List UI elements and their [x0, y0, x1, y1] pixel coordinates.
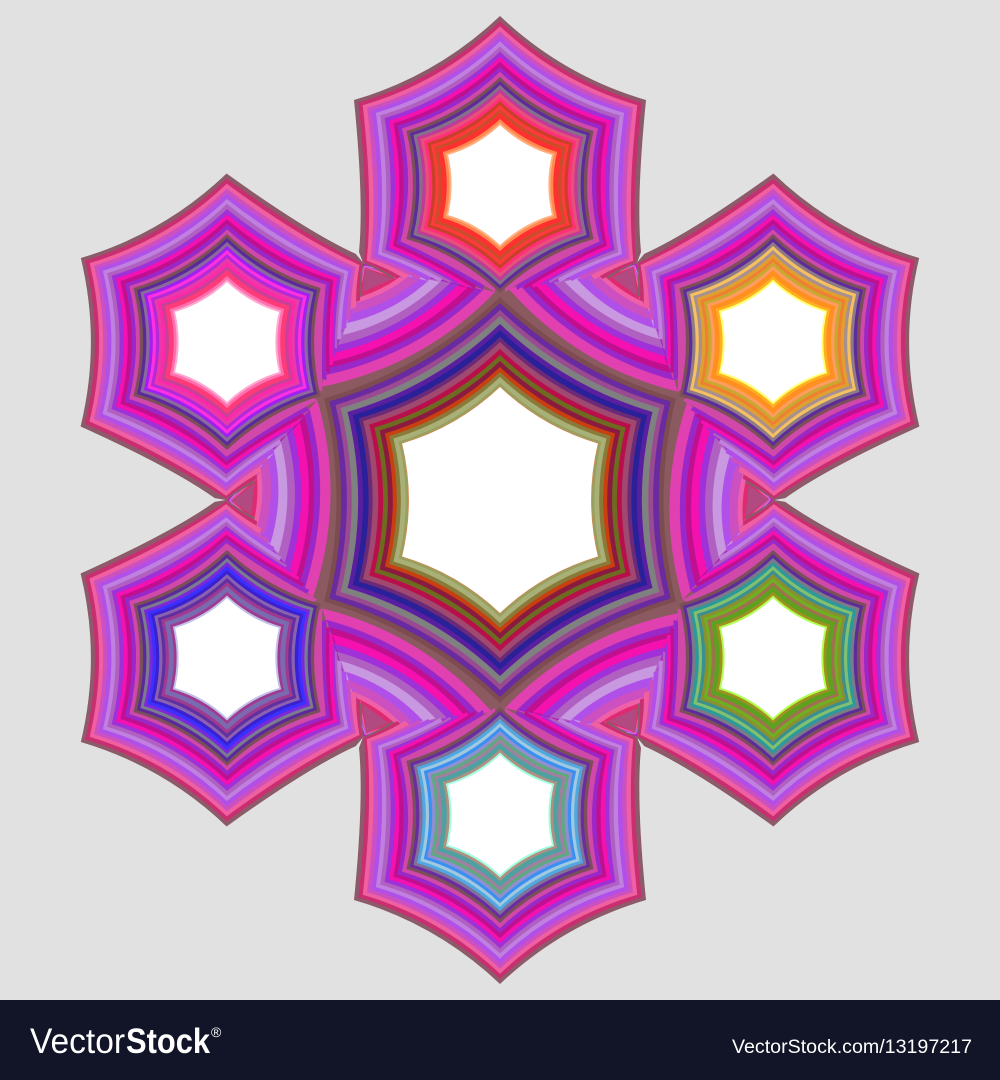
hexagon: lower left blue: [133, 550, 321, 766]
outer bands: upper right petal: [607, 132, 992, 522]
hexagon: upper left magenta: [133, 234, 321, 450]
hexagon: top red: [406, 77, 594, 293]
outer bands: lower right petal: [607, 478, 992, 868]
outer bands: bottom petal: [354, 708, 646, 984]
logo: VectorStock: ®: [211, 1024, 222, 1040]
hexagon: lower right green: [679, 550, 867, 766]
logo: VectorStock: [30, 1022, 222, 1061]
hexagon: centre: [324, 297, 676, 703]
hexagon: bottom cyan: [406, 707, 594, 923]
hexagon: upper right yellow: [679, 234, 867, 450]
image id: VectorStock.com/13197217: [732, 1037, 972, 1058]
footer bar: [0, 1000, 1000, 1080]
triangle fans between petals: [204, 225, 796, 775]
outer bands: lower left petal: [8, 478, 393, 868]
logo: VectorStock: Stock: [126, 1022, 210, 1061]
outer bands: top petal: [354, 16, 646, 292]
backing fill behind petals: [226, 263, 774, 737]
outer bands: upper left petal: [8, 132, 393, 522]
logo: VectorStock: Vector: [30, 1022, 125, 1061]
